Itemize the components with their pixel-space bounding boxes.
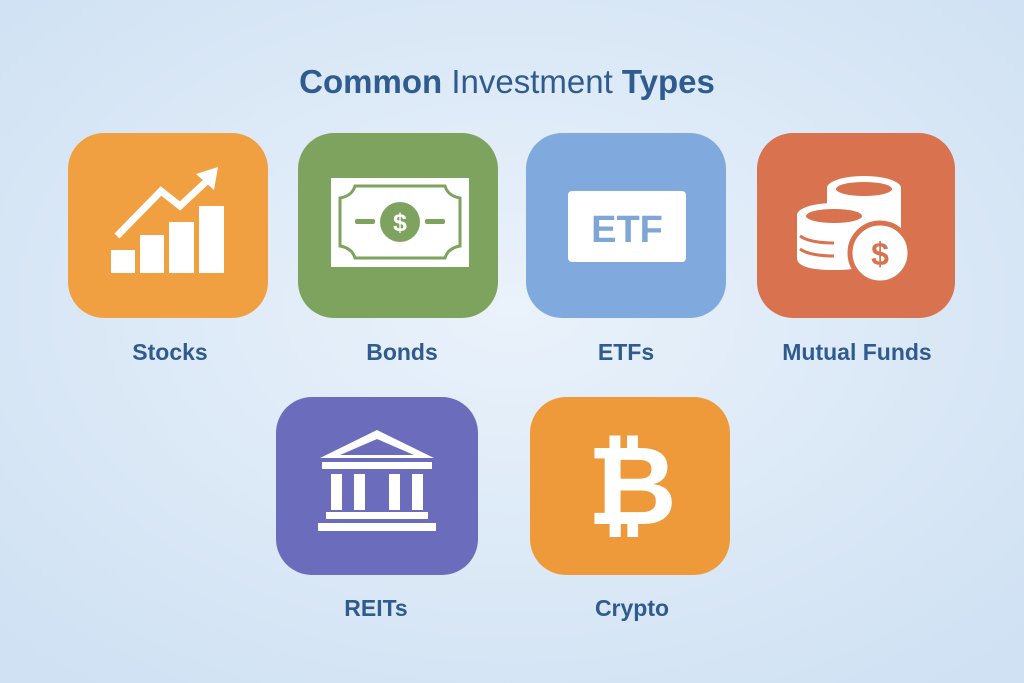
label: crypto: Crypto xyxy=(595,595,669,621)
panel: bonds xyxy=(298,133,498,365)
icon: coins with dollar xyxy=(797,176,910,283)
label: bonds: Bonds xyxy=(366,339,438,365)
icon: coins with dollar: $ xyxy=(871,236,889,272)
panel: REITs xyxy=(276,397,478,621)
panel: ETFs xyxy=(526,133,726,365)
icon: banknote: $ xyxy=(393,209,407,237)
icon: ETF badge xyxy=(568,191,686,262)
label: ETFs: ETFs xyxy=(598,339,654,365)
panel: mutual funds xyxy=(757,133,955,365)
icon: ETF badge: ETF xyxy=(591,209,663,251)
label: REITs: REITs xyxy=(344,595,408,621)
icon: banknote xyxy=(331,178,469,267)
panel: crypto xyxy=(530,397,730,621)
label: mutual funds: Mutual Funds xyxy=(782,339,932,365)
icon: bar chart with arrow xyxy=(111,167,224,273)
icon: building with columns xyxy=(318,430,436,531)
icon: bitcoin: ₿ xyxy=(587,425,677,548)
label: stocks: Stocks xyxy=(132,339,208,365)
panel: stocks xyxy=(68,133,268,365)
title: Common Investment Types xyxy=(299,63,715,100)
